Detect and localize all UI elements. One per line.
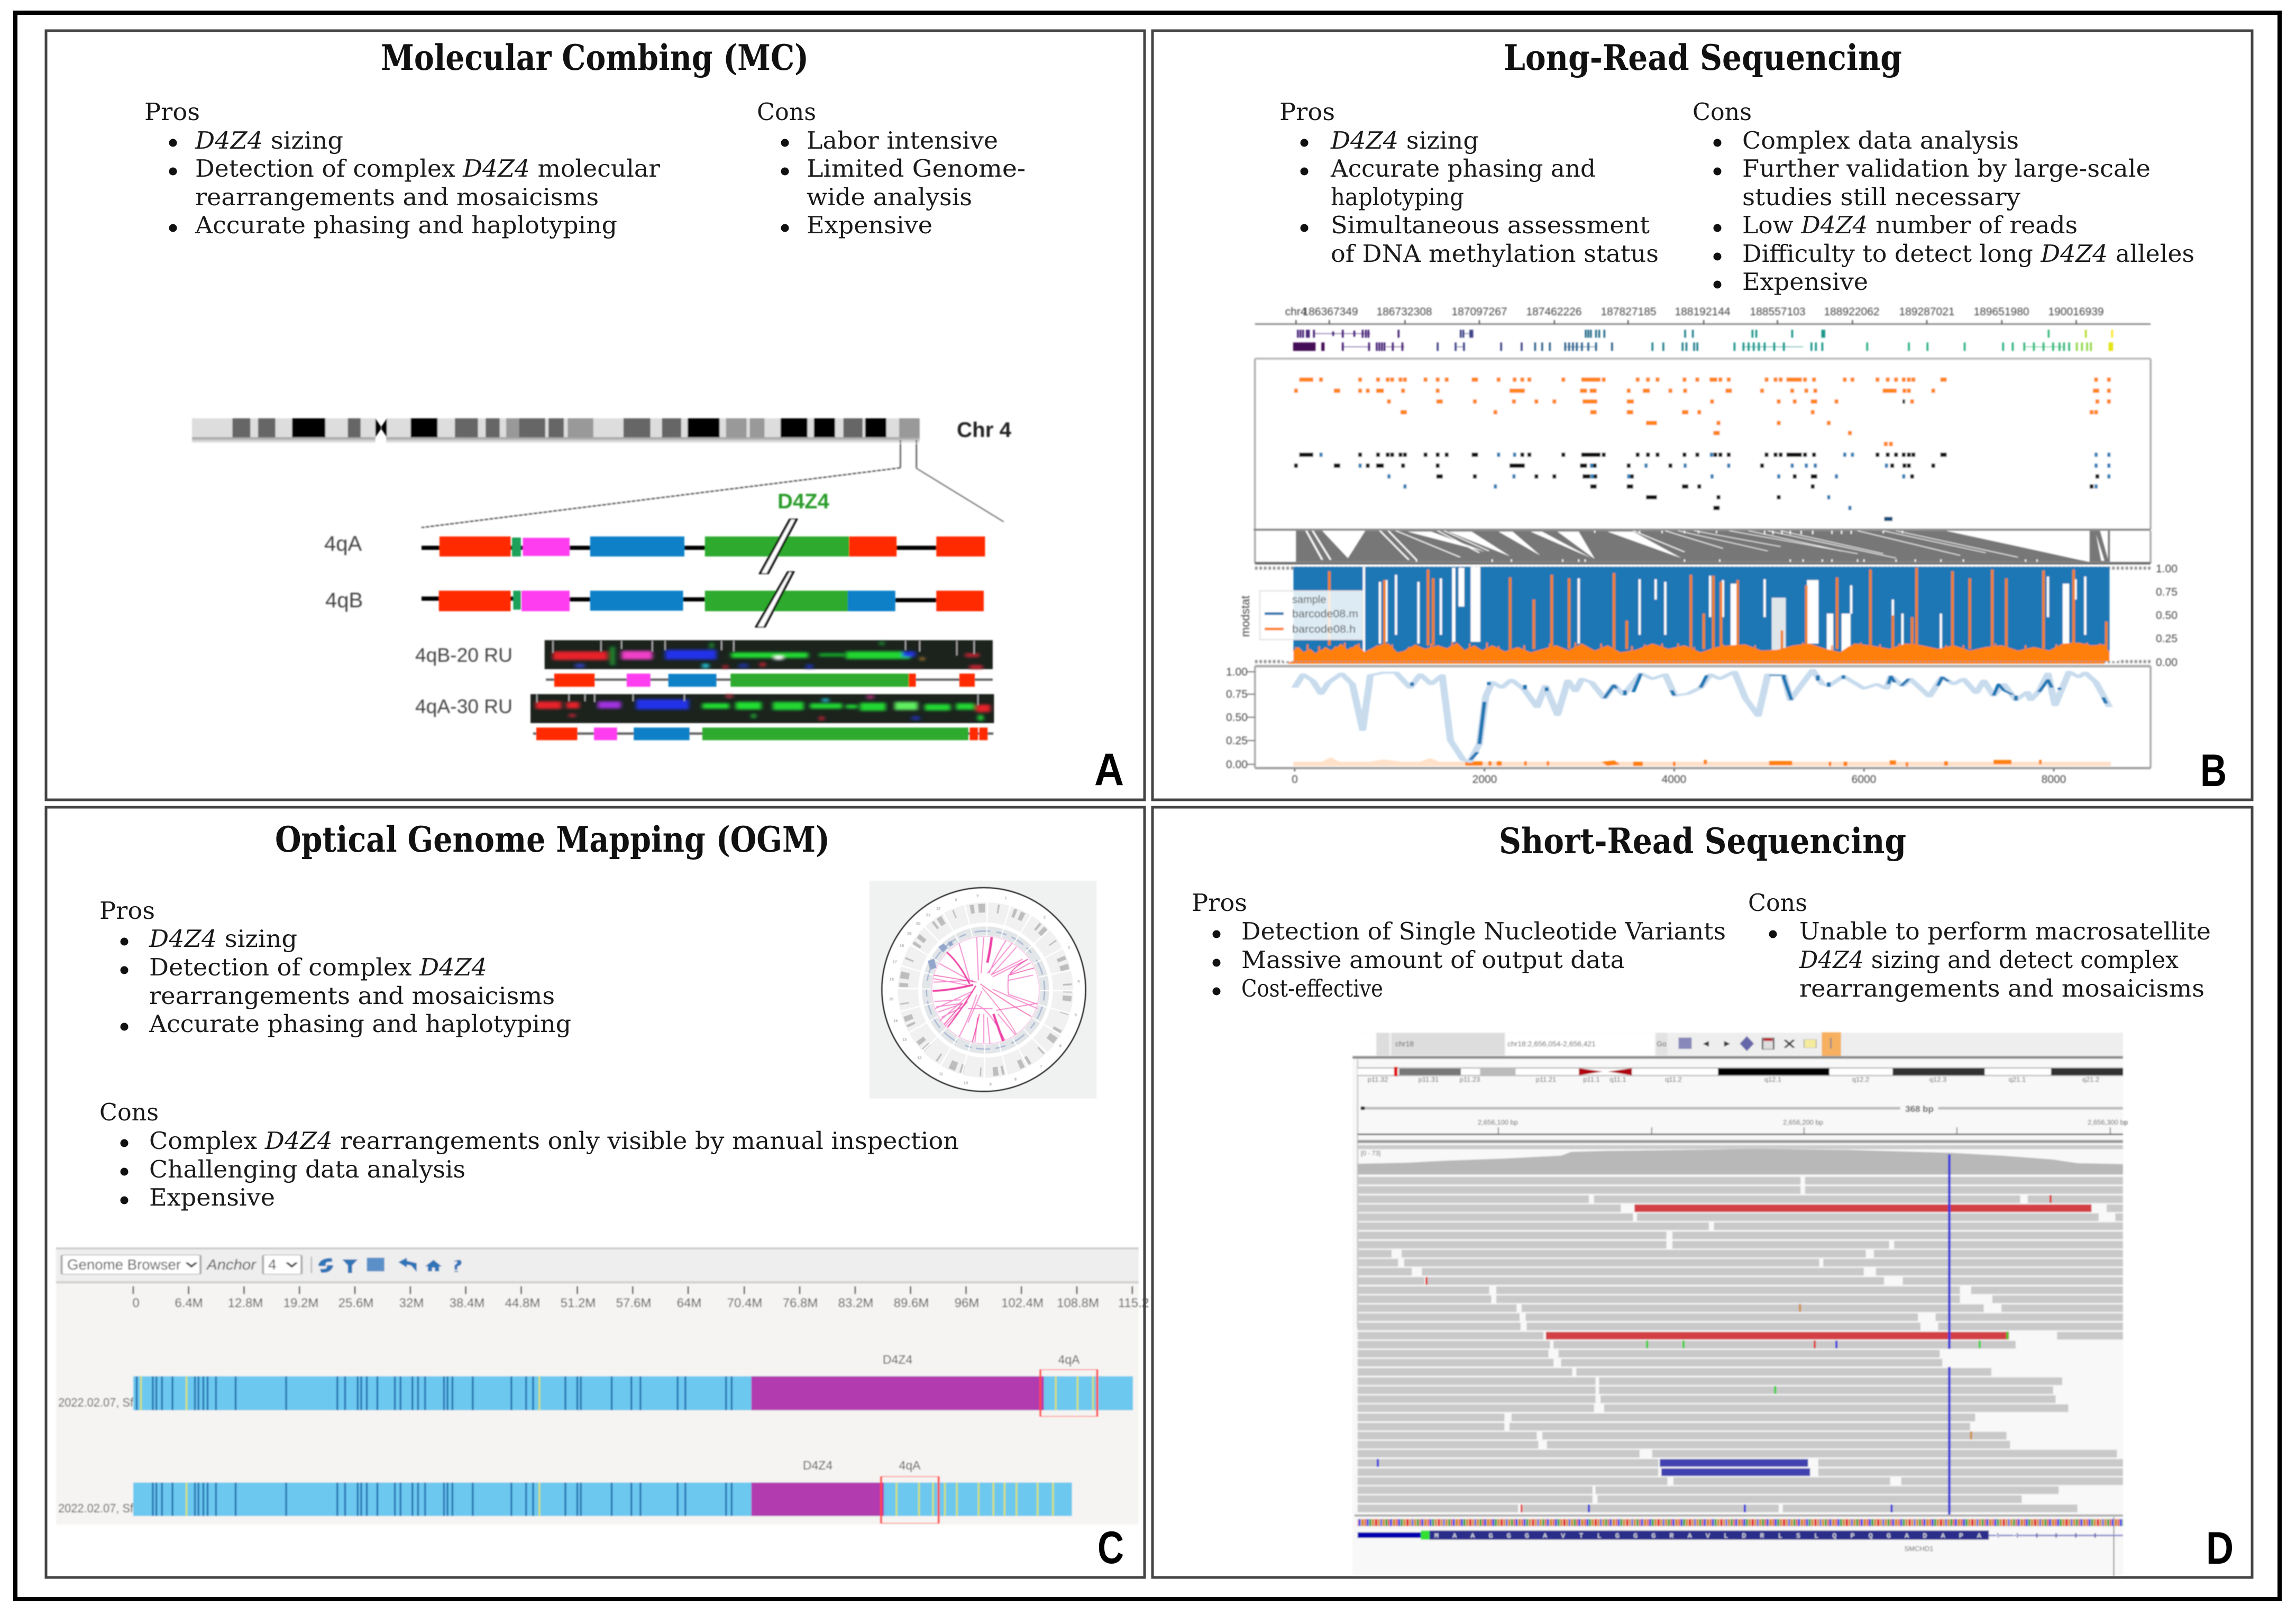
toolbar text: Genome Browser	[67, 1256, 181, 1273]
map 1	[133, 1370, 1133, 1417]
modstat violin panel	[1255, 567, 2151, 664]
ruler labels: 57.6M	[616, 1296, 651, 1310]
chart: circos plot: 2	[1044, 915, 1046, 920]
chart: circos plot	[870, 881, 1096, 1099]
text block: long-read cons	[1693, 98, 2194, 296]
chart: circos plot: 13	[902, 1037, 907, 1042]
text block: long-read cons: Complex data analysis	[1742, 126, 2019, 154]
legend: barcode08.h	[1292, 624, 1356, 635]
toolbar icons	[318, 1258, 462, 1273]
panel: Short-Read Sequencing (D)	[1152, 807, 2252, 1577]
reference sequence	[1355, 1514, 2123, 1517]
legend	[1260, 591, 1362, 640]
heading: Short-Read Sequencing: Short-Read Sequencing	[1499, 820, 1906, 862]
cytoband labels: p11.23	[1460, 1075, 1480, 1083]
text block: OGM pros: Accurate phasing and haplotyping	[149, 1010, 571, 1038]
figure: methylation browser	[1226, 306, 2178, 786]
genomic coordinate labels: 186367349	[1302, 306, 1358, 318]
map labels: D4Z4	[883, 1353, 912, 1366]
ruler labels: 96M	[955, 1296, 979, 1310]
deletion reads	[1546, 1208, 2091, 1336]
sample labels	[58, 1395, 134, 1515]
ruler and coverage rule	[1362, 1105, 2123, 1112]
genomic coordinate labels	[1285, 306, 2104, 318]
text block: OGM pros: D4Z4 sizing	[149, 925, 297, 953]
chart: circos plot: 22	[936, 906, 940, 911]
text block: MC cons	[757, 98, 1026, 239]
text block: long-read cons: Further validation by large-scale	[1742, 154, 2151, 183]
x axis values	[1292, 773, 2066, 786]
panel C border	[46, 807, 1145, 1577]
heading: Molecular Combing: Molecular Combing (MC)	[381, 37, 809, 78]
chart: circos plot: 7	[1040, 1064, 1042, 1069]
chart: circos plot: 17	[893, 959, 897, 964]
axis label: modstat: modstat	[1239, 596, 1252, 637]
browser canvas	[56, 1283, 1139, 1525]
x axis values: 2000	[1472, 773, 1497, 786]
genomic coordinate labels: 190016939	[2048, 306, 2104, 318]
text block: long-read cons: Cons	[1693, 98, 1752, 126]
chart: circos plot: 5	[1075, 1012, 1077, 1017]
text block: short-read pros: Massive amount of output data	[1241, 946, 1625, 974]
text block: OGM pros: rearrangements and mosaicisms	[149, 982, 555, 1010]
figure: IGV browser	[1352, 1032, 2128, 1576]
cytoband labels: q12.2	[1852, 1075, 1869, 1083]
text block: long-read pros: Accurate phasing and	[1330, 154, 1596, 183]
text block: long-read cons: Expensive	[1742, 268, 1868, 296]
chart: circos plot: Y	[976, 893, 979, 898]
label: 4qA: 4qA	[324, 532, 362, 555]
coordinate labels: 2,656,100 bp	[1478, 1118, 1518, 1126]
ruler labels: 102.4M	[1001, 1296, 1044, 1310]
chart: circos plot: 12	[917, 1055, 921, 1060]
ruler labels: 25.6M	[339, 1296, 373, 1310]
cytoband	[1358, 1067, 2123, 1076]
right axis values: 1.00	[2156, 563, 2178, 575]
text block: MC pros	[144, 98, 660, 239]
genomic coordinate labels: 188922062	[1824, 306, 1880, 318]
text block: short-read pros: Detection of Single Nucleotide Variants	[1241, 917, 1726, 945]
text block: OGM cons: Expensive	[149, 1183, 275, 1211]
text block: MC cons: wide analysis	[807, 183, 972, 211]
schematic rows and fibres	[422, 519, 994, 740]
right axis values	[2156, 563, 2178, 669]
text block: OGM cons	[99, 1098, 959, 1211]
coordinate axis	[1255, 322, 2151, 326]
orange reads	[1296, 378, 2109, 446]
gene tracks and read rows	[1254, 320, 2151, 530]
4qA schematic	[422, 536, 985, 556]
label: Chr 4: Chr 4	[957, 418, 1012, 442]
fibre image 4qB	[545, 640, 993, 669]
panel letter A: A	[1094, 744, 1124, 795]
toolbar	[56, 1248, 1139, 1283]
ruler labels: 115.2	[1118, 1296, 1149, 1310]
text block: short-read cons: Cons	[1748, 889, 1807, 917]
text block: OGM pros	[99, 897, 571, 1038]
ruler ticks	[133, 1286, 1132, 1294]
fibre schematic 4qA	[533, 727, 993, 740]
chart: circos plot: 20	[916, 921, 920, 926]
text block: OGM cons: Challenging data analysis	[149, 1155, 465, 1183]
text block: OGM cons: Cons	[99, 1098, 159, 1126]
panel D border	[1152, 807, 2252, 1577]
cytoband labels: q12.3	[1929, 1075, 1946, 1083]
sample labels: 2022.02.07, Sf	[58, 1395, 134, 1409]
IGV toolbar	[1352, 1032, 2123, 1056]
x axis values: 0	[1292, 773, 1298, 786]
cytoband labels: q11.2	[1665, 1075, 1682, 1083]
locus text: chr18	[1395, 1039, 1414, 1048]
map labels: D4Z4	[803, 1458, 833, 1472]
cytoband labels: p11.31	[1419, 1075, 1439, 1083]
map 2	[133, 1476, 1072, 1523]
ruler labels: 83.2M	[838, 1296, 873, 1310]
fibre image 4qA	[530, 694, 994, 723]
chart: circos plot: 15	[889, 997, 893, 1001]
ruler labels: 32M	[399, 1296, 424, 1310]
cytoband labels: p11.21	[1536, 1075, 1556, 1083]
cytoband labels: q21.1	[2009, 1075, 2026, 1083]
read-to-position connection fan	[1255, 531, 2151, 563]
ruler labels: 51.2M	[561, 1296, 596, 1310]
label: 4qB-20 RU: 4qB-20 RU	[415, 644, 513, 666]
text block: short-read cons: Unable to perform macrosatellite	[1799, 917, 2211, 945]
legend: sample	[1292, 594, 1326, 606]
map labels: 4qA	[899, 1458, 921, 1472]
panel letter B: B	[2200, 745, 2227, 796]
left axis values: 0.25	[1226, 735, 1248, 747]
chart: circos plot: 11	[939, 1072, 943, 1076]
locus text	[1361, 1039, 1667, 1157]
text block: short-read pros: Pros	[1192, 889, 1247, 917]
chart: circos plot: 8	[1014, 1077, 1017, 1082]
panel A border	[46, 31, 1145, 800]
label: D4Z4: D4Z4	[777, 490, 830, 513]
text block: MC cons: Cons	[757, 98, 816, 126]
black reads	[1296, 453, 2097, 510]
locus text: [0 - 73]	[1361, 1149, 1380, 1157]
read frame	[1255, 359, 2151, 529]
ruler labels: 76.8M	[783, 1296, 818, 1310]
text block: MC pros: Accurate phasing and haplotyping	[195, 211, 617, 239]
variant ticks	[1378, 1195, 2051, 1512]
genomic coordinate labels: 189287021	[1899, 306, 1955, 318]
smoothed methylation line chart	[1247, 666, 2151, 771]
chart: circos plot: X	[955, 898, 957, 902]
text block: long-read pros: Pros	[1279, 98, 1335, 126]
selected position line	[1948, 1154, 1951, 1516]
text block: MC pros: rearrangements and mosaicisms	[195, 183, 599, 211]
text block: OGM cons: Complex D4Z4 rearrangements only visible by manual inspection	[149, 1127, 959, 1155]
cytoband labels: p11.32	[1368, 1075, 1388, 1083]
cytoband labels: q11.1	[1609, 1075, 1626, 1083]
text block: short-read pros: Cost-effective	[1241, 974, 1383, 1002]
coverage track	[1358, 1149, 2123, 1174]
right axis values: 0.25	[2156, 633, 2178, 645]
cytoband labels: q21.2	[2082, 1075, 2099, 1083]
ruler labels: 6.4M	[175, 1296, 203, 1310]
sample labels: 2022.02.07, Sf	[58, 1501, 134, 1515]
panel: Long-Read Sequencing (B)	[1152, 31, 2252, 800]
map labels: 4qA	[1058, 1353, 1080, 1366]
gene model	[1358, 1530, 2123, 1540]
chart: circos plot: 1	[1005, 896, 1007, 900]
cytoband labels: q12.1	[1764, 1075, 1781, 1083]
break marks	[756, 519, 797, 627]
ruler labels: 12.8M	[228, 1296, 263, 1310]
figure: genome browser	[56, 1248, 1149, 1525]
figure: chromosome 4 and 4q subtelomere combing	[192, 418, 1012, 740]
genomic coordinate labels: 187097267	[1451, 306, 1507, 318]
genomic coordinate labels: 189651980	[1973, 306, 2029, 318]
ruler labels: 19.2M	[283, 1296, 318, 1310]
panel letter C: C	[1097, 1522, 1124, 1573]
chart: circos plot: 14	[893, 1018, 898, 1023]
x axis values: 4000	[1662, 773, 1686, 786]
ruler labels: 44.8M	[505, 1296, 540, 1310]
genomic coordinate labels: 188192144	[1675, 306, 1731, 318]
ruler labels: 89.6M	[894, 1296, 929, 1310]
x axis values: 8000	[2042, 773, 2066, 786]
genomic coordinate labels: 186732308	[1376, 306, 1432, 318]
ruler labels	[132, 1296, 1149, 1310]
gene track	[1295, 330, 2112, 351]
panel B border	[1152, 31, 2252, 800]
chart: circos plot: 6	[1059, 1043, 1062, 1048]
blue reads	[1321, 453, 2109, 510]
heading: Long-Read Sequencing: Long-Read Sequencing	[1504, 37, 1902, 78]
text block: short-read cons: D4Z4 sizing and detect complex	[1799, 946, 2179, 974]
text block: OGM pros: Pros	[99, 897, 155, 925]
ruler labels: 108.8M	[1057, 1296, 1099, 1310]
label: 4qB: 4qB	[325, 589, 363, 612]
right axis values: 0.00	[2156, 656, 2178, 669]
ruler labels: 38.4M	[450, 1296, 484, 1310]
text block: MC pros: D4Z4 sizing	[195, 126, 343, 154]
left axis values: 0.00	[1226, 759, 1248, 771]
duplication reads	[1660, 1463, 1810, 1472]
text block: long-read pros: Simultaneous assessment	[1331, 211, 1650, 239]
legend: barcode08.m	[1292, 608, 1358, 620]
chart: circos plot: 21	[926, 913, 930, 917]
toolbar text	[67, 1256, 277, 1273]
gene name: SMCHD1	[1905, 1545, 1933, 1553]
text block: long-read cons: studies still necessary	[1742, 183, 2021, 211]
left axis values: 0.75	[1226, 688, 1248, 700]
text block: long-read pros: haplotyping	[1331, 183, 1464, 211]
text block: MC cons: Expensive	[807, 211, 932, 239]
panel: Molecular Combing (A)	[46, 31, 1145, 800]
chart: circos plot: 10	[964, 1080, 968, 1085]
toolbar text: 4	[268, 1256, 277, 1273]
genomic coordinate labels: 188557103	[1750, 306, 1806, 318]
text block: long-read pros: of DNA methylation status	[1331, 240, 1659, 268]
cytoband labels: p11.1	[1583, 1075, 1600, 1083]
text block: MC pros: Detection of complex D4Z4 molecular	[195, 154, 660, 183]
chart: circos plot: 18	[900, 943, 904, 948]
heading: Optical Genome Mapping: Optical Genome Mapping (OGM)	[275, 819, 830, 860]
left axis values	[1226, 666, 1248, 771]
coordinate labels	[1478, 1118, 2128, 1126]
locus text: chr18:2,656,054-2,656,421	[1507, 1039, 1596, 1048]
map labels	[803, 1353, 1080, 1472]
ruler labels: 0	[132, 1296, 140, 1310]
nucleotide track	[1358, 1519, 2123, 1526]
chart: circos plot: 4	[1077, 979, 1080, 984]
right axis values: 0.50	[2156, 609, 2178, 622]
text block: MC cons: Labor intensive	[807, 126, 998, 154]
text block: OGM pros: Detection of complex D4Z4	[149, 953, 487, 981]
text block: long-read pros: D4Z4 sizing	[1330, 126, 1479, 154]
genomic coordinate labels: chr4	[1285, 306, 1307, 318]
left axis values: 1.00	[1226, 666, 1248, 678]
chart: circos plot: 9	[990, 1082, 992, 1087]
fibre schematic 4qB	[546, 673, 993, 687]
ruler labels: 64M	[677, 1296, 701, 1310]
text block: long-read cons: Difficulty to detect long D4Z4 alleles	[1742, 240, 2194, 268]
text block: short-read pros	[1192, 889, 1726, 1002]
region length label: 368 bp	[1905, 1104, 1934, 1114]
toolbar text: Anchor	[206, 1256, 257, 1273]
text block: MC cons: Limited Genome-	[807, 154, 1026, 183]
chart: circos plot: 16	[890, 977, 894, 981]
4qB schematic	[422, 591, 984, 611]
amino acid letters: MAAGGGAVTLGGGRAVLDRLSLQPQGADAPAVQ	[1434, 1532, 2032, 1540]
coordinate labels: 2,656,200 bp	[1783, 1118, 1823, 1126]
aligned reads	[1355, 1154, 2123, 1576]
panel: Optical Genome Mapping (C)	[46, 807, 1149, 1577]
locus text: Go	[1657, 1039, 1667, 1048]
text block: long-read cons: Low D4Z4 number of reads	[1742, 211, 2078, 239]
right axis values: 0.75	[2156, 586, 2178, 598]
x axis values: 6000	[1852, 773, 1876, 786]
ruler labels: 70.4M	[727, 1296, 762, 1310]
label: 4qA-30 RU: 4qA-30 RU	[415, 696, 513, 717]
text block: long-read pros	[1279, 98, 1659, 268]
coordinate labels: 2,656,300 bp	[2088, 1118, 2128, 1126]
genomic coordinate labels: 187827185	[1600, 306, 1657, 318]
text block: MC pros: Pros	[144, 98, 200, 126]
left axis values: 0.50	[1226, 711, 1248, 724]
chart: circos plot: 3	[1068, 945, 1070, 950]
text block: short-read cons	[1748, 889, 2211, 1002]
panel letter D: D	[2206, 1523, 2234, 1574]
genomic coordinate labels: 187462226	[1526, 306, 1582, 318]
chromosome ideogram	[192, 418, 1004, 527]
chart: circos plot: 19	[907, 931, 911, 936]
text block: short-read cons: rearrangements and mosaicisms	[1799, 974, 2204, 1002]
IGV canvas	[1352, 1033, 2123, 1575]
cytoband labels	[1368, 1075, 2099, 1083]
